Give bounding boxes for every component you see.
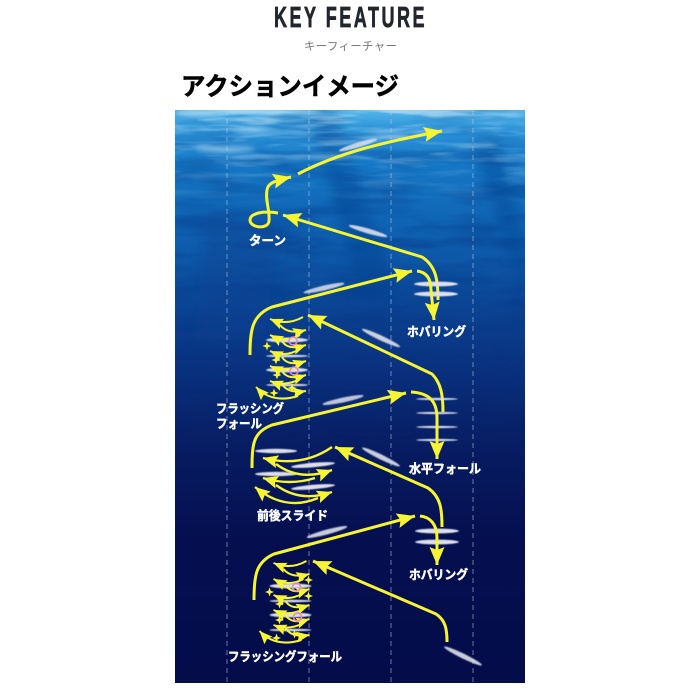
- label: flashing fall 1: [216, 401, 284, 431]
- arrow: long rise 2: [252, 393, 406, 468]
- arrow: horizontal fall descent: [411, 392, 437, 459]
- label: flashing fall 1: フラッシング: [216, 401, 284, 416]
- group: flashing fall 1: [256, 317, 308, 399]
- arrow: rising back to turn: [283, 215, 438, 300]
- arrow: long rise 1: [250, 271, 412, 355]
- arrow: long rise 3: [254, 516, 415, 600]
- lure: fifth: [322, 393, 364, 407]
- subtitle: katakana reading: キーフィーチャー: [304, 40, 397, 53]
- depth guide lines: [227, 110, 473, 683]
- lure: top: [338, 137, 378, 153]
- heading: action image: アクションイメージ: [181, 73, 399, 101]
- title: KEY FEATURE: KEY FEATURE: [274, 2, 427, 34]
- lure: bottom start: [443, 645, 483, 667]
- label: horizontal fall: 水平フォール: [409, 461, 481, 476]
- label: hovering 2: ホバリング: [409, 567, 468, 582]
- label: front-back slide: 前後スライド: [257, 508, 328, 523]
- arrow: turn loop: [250, 177, 291, 227]
- arrow: rising from bottom: [313, 561, 447, 642]
- lure: hovering pair 1: [414, 282, 458, 296]
- arrow: hovering descent 1: [417, 271, 434, 320]
- lure: hovering pair 2: [415, 529, 459, 544]
- lure: horizontal fall series: [416, 398, 458, 441]
- arrow: hovering descent 2: [420, 516, 437, 565]
- label: flashing fall 2: フラッシングフォール: [228, 649, 342, 664]
- label: hovering 1: ホバリング: [407, 324, 466, 339]
- lure: seventh: [306, 524, 348, 540]
- arrow: rising to surface: [298, 131, 442, 174]
- arrow: rising to flashing fall 1: [308, 315, 443, 412]
- lure: second: [348, 223, 388, 239]
- lure: sixth: [361, 446, 401, 468]
- lure: fourth: [361, 327, 401, 349]
- label: turn: ターン: [249, 234, 286, 248]
- group: flashing fall 2: [260, 561, 313, 643]
- lure: third: [303, 281, 345, 295]
- panel: underwater action diagram: [175, 110, 525, 683]
- group: front-back slide: [255, 447, 335, 503]
- arrow: rising to slide: [335, 447, 442, 527]
- label: flashing fall 1: フォール: [216, 417, 262, 431]
